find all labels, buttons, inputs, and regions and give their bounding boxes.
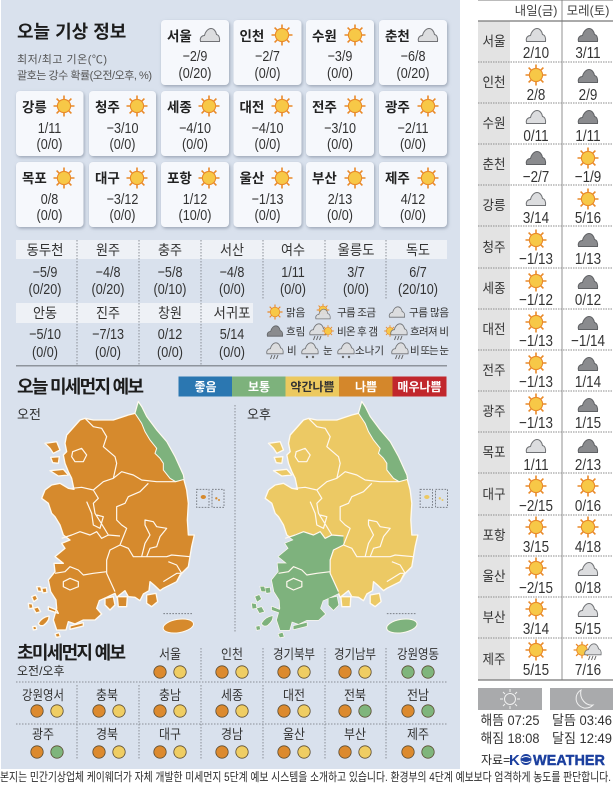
table: two-day forecast: 모레(토): [567, 4, 609, 18]
table: other cities: (0/0): [95, 343, 121, 360]
card: 세종: −4/10: [179, 119, 211, 136]
panel: moon times: [550, 688, 613, 746]
panel: sun times: 해뜸 07:25: [480, 713, 540, 728]
label: 오전: 오전: [17, 407, 41, 422]
card: 강릉: 1/11: [38, 119, 62, 136]
table: two-day forecast: −1/9: [575, 169, 601, 186]
card: 청주: 청주: [95, 100, 120, 115]
grid: PM2.5 forecast: 울산: [283, 727, 305, 742]
table: other cities: 울릉도: [338, 242, 375, 258]
table: other cities: 서귀포: [214, 305, 251, 321]
table: other cities: [16, 240, 447, 365]
table: two-day forecast: 0/16: [575, 498, 601, 515]
card: 인천: 인천: [240, 29, 264, 44]
table: two-day forecast: 세종: [482, 281, 506, 296]
heading: 오늘 미세먼지 예보: 오늘 미세먼지 예보: [17, 377, 144, 397]
card: 울산: [234, 162, 302, 227]
card: 청주: (0/0): [110, 135, 135, 152]
grid: PM2.5 forecast: 경기북부: [273, 647, 315, 662]
grid: PM2.5 forecast: 경기남부: [334, 647, 376, 662]
table: two-day forecast: 대구: [482, 487, 506, 502]
source credit: [481, 752, 605, 769]
card: 광주: 광주: [385, 100, 410, 115]
legend: dust grade bar: 매우나쁨: [397, 379, 442, 394]
card: 인천: (0/0): [255, 64, 280, 81]
table: other cities: 0/12: [158, 325, 182, 342]
table: two-day forecast: 강릉: [482, 198, 506, 213]
table: two-day forecast: 3/14: [523, 621, 549, 638]
card: 광주: [379, 91, 447, 156]
table: other cities: 충주: [158, 242, 182, 258]
table: two-day forecast: 광주: [482, 404, 506, 419]
card: 강릉: 강릉: [22, 100, 47, 115]
card: 수원: (0/0): [327, 64, 353, 81]
grid: PM2.5 forecast: 강원영서: [22, 688, 64, 703]
table: other cities: 안동: [33, 305, 57, 321]
table: other cities: 진주: [96, 305, 120, 321]
table: two-day forecast: 전주: [482, 363, 506, 378]
note: 오전/오후: 오전/오후: [17, 664, 64, 678]
card: 광주: −2/11: [398, 119, 429, 136]
legend: weather icons: 눈: [323, 345, 333, 357]
table: other cities: (0/20): [92, 280, 124, 297]
panel: moon times: 달짐 12:49: [552, 731, 612, 746]
card: 대전: 대전: [240, 100, 264, 115]
table: other cities: 동두천: [26, 242, 64, 258]
card: 청주: −3/10: [107, 119, 139, 136]
legend: weather icons: 비온 후 갬: [337, 326, 378, 338]
table: two-day forecast: 1/11: [575, 128, 601, 145]
grid: PM2.5 forecast: 대구: [159, 727, 181, 742]
grid: PM2.5 forecast: 경북: [96, 727, 118, 742]
table: other cities: (0/20): [29, 280, 61, 297]
card: 청주: [89, 91, 156, 156]
legend: dust grade bar: [178, 376, 446, 396]
card: 서울: 서울: [167, 29, 192, 44]
table: two-day forecast: 3/11: [575, 45, 601, 62]
grid: PM2.5 forecast: 제주: [407, 727, 429, 742]
legend: weather icons: [267, 304, 449, 359]
card: 세종: (0/0): [182, 135, 208, 152]
grid: PM2.5 forecast: 전남: [407, 688, 429, 703]
table: other cities: (0/0): [219, 343, 245, 360]
legend: weather icons: 흐려져 비: [410, 326, 449, 338]
card: 부산: 부산: [312, 171, 337, 186]
grid: PM2.5 forecast: 충북: [96, 688, 118, 703]
table: two-day forecast: 내일(금): [515, 4, 557, 18]
card: 수원: −3/9: [328, 47, 353, 64]
table: other cities: (0/0): [157, 343, 183, 360]
table: two-day forecast: 5/16: [575, 210, 601, 227]
card: 제주: 4/12: [401, 190, 425, 207]
table: two-day forecast: 2/10: [523, 45, 549, 62]
table: two-day forecast: [478, 0, 613, 680]
card: 제주: 제주: [385, 171, 410, 186]
subtitle note: [17, 53, 152, 82]
grid: PM2.5 forecast: 인천: [221, 647, 243, 662]
table: two-day forecast: 0/11: [523, 128, 549, 145]
table: two-day forecast: 춘천: [482, 157, 506, 172]
legend: weather icons: 맑음: [286, 307, 306, 319]
source credit: WEATHER: [533, 752, 605, 769]
table: two-day forecast: −2/15: [519, 498, 553, 515]
table: two-day forecast: 2/9: [579, 87, 597, 104]
table: other cities: 3/7: [347, 263, 365, 280]
table: two-day forecast: 3/14: [523, 210, 549, 227]
card: 제주: [379, 162, 447, 227]
legend: dust grade bar: 나쁨: [355, 380, 377, 394]
map: afternoon PM10: [252, 402, 447, 637]
card: 목포: [16, 162, 84, 227]
grid: PM2.5 forecast: 전북: [344, 688, 366, 703]
map: morning PM10: [28, 402, 224, 637]
card: 울산: −1/13: [252, 190, 284, 207]
panel: sun times: 해짐 18:08: [480, 731, 540, 746]
table: other cities: 독도: [406, 242, 430, 258]
legend: dust grade bar: 좋음: [194, 380, 217, 394]
table: two-day forecast: 4/18: [575, 539, 601, 556]
card: 부산: (0/0): [327, 206, 353, 223]
table: two-day forecast: 대전: [482, 322, 506, 337]
card: 서울: −2/9: [183, 47, 208, 64]
grid: PM2.5 forecast: [16, 647, 447, 760]
table: two-day forecast: −1/14: [571, 333, 605, 350]
table: other cities: 서산: [220, 242, 244, 258]
table: two-day forecast: 인천: [482, 75, 506, 90]
table: two-day forecast: 3/15: [523, 539, 549, 556]
card: 강릉: (0/0): [37, 135, 62, 152]
grid: PM2.5 forecast: 충남: [159, 688, 181, 703]
card: 춘천: −6/8: [401, 47, 426, 64]
title: 오늘 기상 정보: [17, 22, 126, 42]
table: other cities: −4/8: [220, 263, 245, 280]
table: two-day forecast: 5/15: [575, 621, 601, 638]
panel: moon times: 달뜸 03:46: [552, 713, 612, 728]
table: two-day forecast: −2/15: [519, 580, 553, 597]
table: two-day forecast: 1/11: [523, 457, 549, 474]
card: 전주: (0/0): [327, 135, 353, 152]
legend: weather icons: 구름 많음: [409, 307, 449, 319]
card: 대구: −3/12: [107, 190, 138, 207]
table: two-day forecast: 7/16: [575, 662, 601, 679]
table: two-day forecast: −1/13: [519, 374, 553, 391]
table: two-day forecast: 울산: [482, 569, 506, 584]
table: two-day forecast: 2/8: [527, 87, 545, 104]
grid: PM2.5 forecast: 세종: [221, 688, 243, 703]
card: 대전: [234, 91, 302, 156]
table: other cities: −7/13: [92, 325, 124, 342]
grid: PM2.5 forecast: 경남: [221, 727, 243, 742]
card: 서울: (0/20): [179, 64, 211, 81]
table: other cities: 6/7: [409, 263, 427, 280]
panel: background: [1, 0, 460, 769]
label: 오후: 오후: [247, 407, 271, 422]
table: two-day forecast: 1/14: [575, 374, 601, 391]
card: 세종: [161, 91, 229, 156]
card: 강릉: [16, 91, 84, 156]
card: 포항: 1/12: [183, 190, 207, 207]
table: two-day forecast: −2/7: [523, 169, 549, 186]
legend: dust grade bar: 보통: [248, 380, 270, 394]
heading: 초미세먼지 예보: 초미세먼지 예보: [17, 643, 126, 663]
grid: PM2.5 forecast: 광주: [32, 727, 54, 742]
card: 포항: [161, 162, 229, 227]
card: 수원: 수원: [312, 29, 337, 44]
card: 목포: 0/8: [41, 190, 59, 207]
table: other cities: −4/8: [96, 263, 121, 280]
table: two-day forecast: 0/12: [575, 292, 601, 309]
legend: weather icons: 소나기: [355, 345, 384, 357]
table: two-day forecast: 부산: [482, 610, 506, 625]
table: two-day forecast: 제주: [482, 652, 506, 667]
card: 전주: 전주: [312, 100, 337, 115]
card: 포항: (10/0): [179, 206, 211, 223]
subtitle note: 괄호는 강수 확률(오전/오후, %): [17, 69, 152, 82]
legend: weather icons: 구름 조금: [337, 307, 376, 319]
source credit: K: [509, 752, 520, 769]
table: two-day forecast: 1/13: [575, 251, 601, 268]
table: two-day forecast: −1/13: [519, 415, 553, 432]
card: 대구: [89, 162, 156, 227]
card: 제주: (0/0): [400, 206, 426, 223]
card: 대전: (0/0): [255, 135, 280, 152]
card: 대구: (0/0): [110, 206, 135, 223]
table: two-day forecast: 서울: [482, 34, 506, 49]
card: 춘천: 춘천: [385, 29, 410, 44]
table: other cities: 원주: [96, 242, 120, 258]
table: two-day forecast: 2/13: [575, 457, 601, 474]
table: two-day forecast: 목포: [482, 445, 506, 460]
card: 대구: 대구: [95, 171, 120, 186]
card: 수원: [306, 20, 374, 85]
card: 부산: 2/13: [328, 190, 353, 207]
card: 대전: −4/10: [252, 119, 284, 136]
table: two-day forecast: 5/15: [523, 662, 549, 679]
table: two-day forecast: −1/13: [519, 333, 553, 350]
card: 광주: (0/0): [400, 135, 426, 152]
table: other cities: −5/9: [33, 263, 58, 280]
card: 춘천: (0/20): [397, 64, 429, 81]
card: 춘천: [379, 20, 447, 85]
table: two-day forecast: −1/13: [519, 251, 553, 268]
table: two-day forecast: 청주: [482, 240, 506, 255]
card: 서울: [161, 20, 229, 85]
card: 세종: 세종: [167, 100, 192, 115]
table: other cities: (0/0): [219, 280, 245, 297]
subtitle note: 최저/최고 기온(℃): [17, 53, 107, 66]
grid: PM2.5 forecast: 강원영동: [397, 647, 439, 662]
table: other cities: 1/11: [281, 263, 305, 280]
panel: sun times: [478, 688, 542, 746]
table: other cities: (0/0): [343, 280, 369, 297]
card: 인천: [234, 20, 302, 85]
table: two-day forecast: 수원: [482, 116, 506, 131]
table: other cities: (20/10): [398, 280, 438, 297]
card: 목포: 목포: [22, 171, 47, 186]
table: other cities: 창원: [158, 305, 182, 321]
legend: weather icons: 비 또는 눈: [410, 345, 449, 357]
legend: weather icons: 비: [287, 345, 297, 357]
table: other cities: (0/0): [32, 343, 58, 360]
table: other cities: 여수: [281, 242, 305, 258]
table: other cities: (0/0): [280, 280, 306, 297]
card: 울산: 울산: [240, 171, 265, 186]
card: 목포: (0/0): [37, 206, 62, 223]
card: 울산: (0/0): [255, 206, 280, 223]
table: other cities: −5/10: [29, 325, 61, 342]
table: other cities: (0/10): [154, 280, 186, 297]
grid: PM2.5 forecast: 부산: [344, 727, 366, 742]
table: two-day forecast: 1/15: [575, 415, 601, 432]
grid: PM2.5 forecast: 대전: [283, 688, 305, 703]
legend: weather icons: 흐림: [286, 326, 305, 338]
table: two-day forecast: −1/12: [519, 292, 553, 309]
card: 전주: [306, 91, 374, 156]
grid: PM2.5 forecast: 서울: [159, 647, 181, 662]
card: 전주: −3/10: [324, 119, 356, 136]
table: two-day forecast: 포항: [482, 528, 506, 543]
source credit: 자료=: [481, 753, 510, 767]
card: 부산: [306, 162, 374, 227]
table: other cities: 5/14: [220, 325, 245, 342]
table: two-day forecast: 0/18: [575, 580, 601, 597]
legend: dust grade bar: 약간나쁨: [290, 380, 335, 394]
card: 포항: 포항: [167, 171, 192, 186]
card: 인천: −2/7: [255, 47, 280, 64]
table: other cities: −5/8: [158, 263, 183, 280]
